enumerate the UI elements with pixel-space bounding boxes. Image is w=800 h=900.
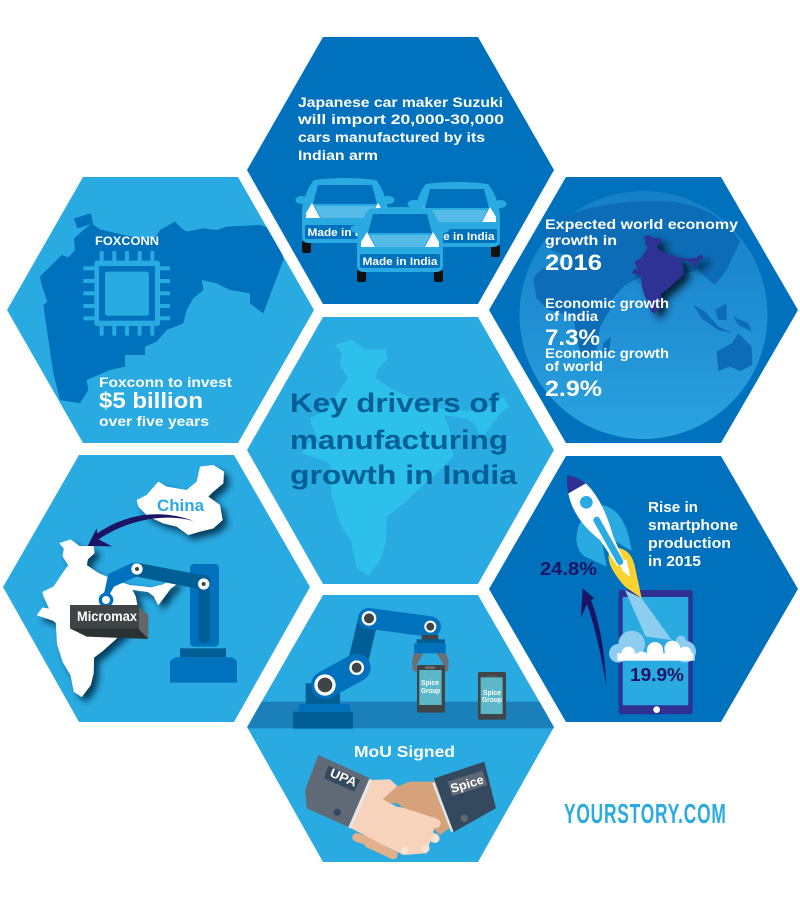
text: expected growth: Economic growth (545, 346, 669, 361)
text: Suzuki import: will import 20,000-30,000 (297, 111, 504, 127)
map: China (137, 465, 224, 535)
panel: central title (247, 317, 554, 584)
text: expected growth: of world (545, 359, 603, 374)
label: Micromax: Micromax (77, 609, 137, 624)
icon: rocket (567, 475, 642, 598)
title: Key drivers of (290, 388, 500, 418)
phone labels: Spice (421, 680, 439, 687)
car: left (296, 178, 394, 253)
car: left: Made in India (308, 227, 383, 239)
text: rise in smartphone production: smartphone (648, 517, 738, 534)
icon: chip (83, 251, 170, 336)
map: India white (37, 539, 177, 697)
value: 24.8%: 24.8% (540, 559, 597, 579)
map: India background (302, 339, 509, 576)
icon: cloud (609, 631, 696, 663)
text: rise in smartphone production (648, 499, 738, 570)
label: UPA: UPA (328, 766, 359, 790)
phone: held (417, 665, 445, 713)
panel: Foxconn investment (7, 177, 314, 443)
map: Maharashtra (40, 213, 283, 403)
text: expected growth: growth in (545, 232, 617, 248)
arrow: rise (581, 588, 606, 687)
panel: smartphone production (489, 456, 798, 722)
text: Foxconn to invest: Foxconn to invest (99, 374, 232, 390)
text: Foxconn to invest: over five years (99, 413, 209, 429)
robot arm (293, 611, 449, 729)
text: expected growth (545, 216, 738, 401)
panel: world economy growth (489, 177, 798, 443)
text: expected growth: of India (545, 309, 599, 324)
text: Suzuki import: Indian arm (298, 147, 378, 163)
panel: Micromax moves from China (3, 455, 310, 722)
title: manufacturing (290, 425, 508, 455)
phone labels: Spice (483, 690, 501, 697)
globe (520, 191, 768, 439)
text: rise in smartphone production: production (648, 535, 731, 552)
robot arm (100, 562, 237, 683)
panel: Suzuki cars (247, 37, 554, 304)
phone labels: Group (482, 697, 502, 704)
car: right: Made in India (420, 231, 495, 243)
conveyor band (247, 702, 554, 728)
phone labels: Group (421, 688, 440, 695)
phone labels (421, 680, 502, 704)
text: expected growth: Expected world economy (545, 216, 738, 232)
heading: MoU Signed: MoU Signed (354, 744, 455, 761)
text: Suzuki import: Japanese car maker Suzuki (298, 94, 503, 110)
label: Spice: Spice (449, 773, 485, 796)
text: expected growth: Economic growth (545, 296, 669, 311)
text: expected growth: 2.9% (545, 376, 602, 401)
panel: MoU signed (247, 595, 554, 862)
handshake (305, 755, 496, 855)
car: right (408, 182, 506, 257)
arrow: China to India (88, 514, 193, 546)
logo: YourStory: YOURSTORY.COM (564, 798, 726, 829)
text: rise in smartphone production: Rise in (648, 499, 698, 516)
box: Micromax (70, 605, 148, 639)
label: FOXCONN: FOXCONN (95, 234, 159, 248)
icon: tablet (619, 590, 693, 714)
title: growth in India (290, 460, 518, 490)
text: Foxconn to invest (99, 374, 232, 429)
text: expected growth: 7.3% (545, 325, 600, 350)
text: Suzuki import (297, 94, 504, 163)
car: front: Made in India (362, 256, 438, 268)
map: India purple (632, 235, 703, 314)
text: Suzuki import: cars manufactured by its (298, 129, 485, 145)
text: Foxconn to invest: $5 billion (99, 388, 203, 413)
value: 19.9%: 19.9% (630, 665, 684, 685)
text: expected growth: 2016 (545, 250, 602, 275)
phone: conveyor (478, 672, 506, 720)
exhaust beam (625, 590, 672, 640)
title (290, 388, 518, 490)
car: front (350, 207, 450, 282)
text: rise in smartphone production: in 2015 (648, 553, 701, 570)
label: China: China (157, 496, 205, 515)
